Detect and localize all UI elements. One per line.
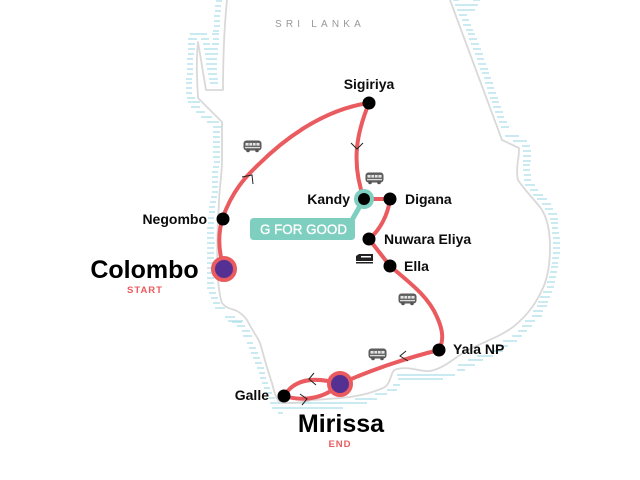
stop: Ella: Ella <box>404 258 429 274</box>
stop: Sigiriya: Sigiriya <box>344 76 394 92</box>
stop: Ella <box>384 258 429 274</box>
stop: Digana <box>384 191 452 207</box>
icon: bus near Negombo <box>244 141 261 152</box>
callout: G for Good <box>250 189 374 240</box>
stop: Yala NP: Yala NP <box>453 341 504 357</box>
stop: Kandy <box>307 191 370 207</box>
icon: bus near Kandy <box>366 173 383 184</box>
icon: bus near Yala <box>369 349 386 360</box>
stop: Galle: Galle <box>235 387 269 403</box>
start: Colombo: Colombo <box>90 256 199 284</box>
end: Mirissa: Mirissa <box>298 410 385 438</box>
stop: Galle <box>235 387 290 403</box>
country label: SRI LANKA <box>275 19 365 30</box>
coastline <box>197 0 550 403</box>
stop: Nuwara Eliya: Nuwara Eliya <box>384 231 471 247</box>
water hatching around the coast <box>186 0 560 413</box>
end: Mirissa: END <box>328 439 352 450</box>
start: Colombo: START <box>127 285 163 296</box>
start: Colombo <box>90 256 235 296</box>
callout: G for Good: G FOR GOOD <box>260 221 347 237</box>
direction arrows <box>242 143 408 405</box>
route line <box>219 103 442 399</box>
stop: Negombo: Negombo <box>142 211 207 227</box>
stop: Kandy: Kandy <box>307 191 350 207</box>
icon: bus near Ella <box>399 294 416 305</box>
icon: train near Nuwara Eliya <box>356 254 373 264</box>
stop: Sigiriya <box>344 76 394 110</box>
stop: Digana: Digana <box>405 191 452 207</box>
end: Mirissa <box>298 373 385 450</box>
